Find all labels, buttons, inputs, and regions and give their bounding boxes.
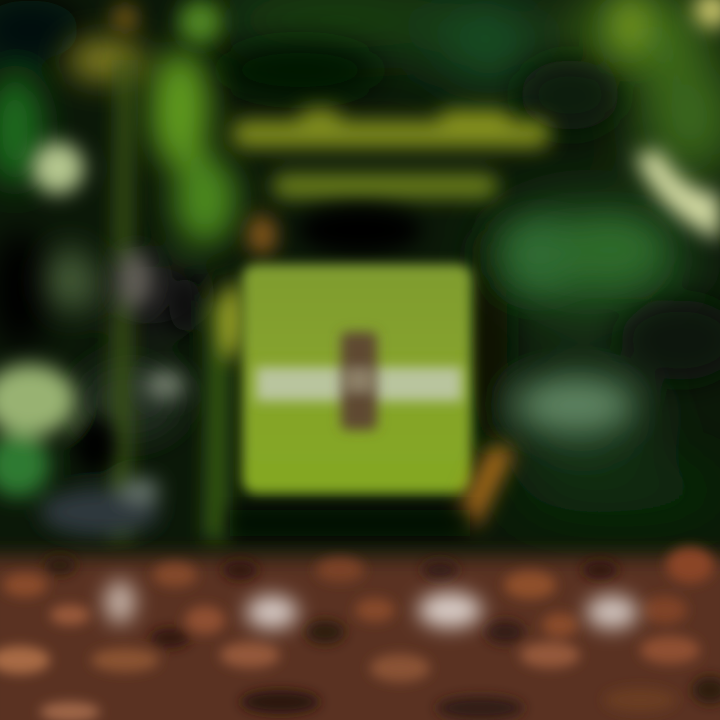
- orange flower stem: [456, 445, 515, 525]
- pale pebbles: [104, 580, 638, 629]
- bamboo plant, left: [32, 0, 276, 540]
- dark arch above box: [298, 206, 422, 254]
- blurred heading lines: [232, 108, 550, 198]
- green product box: [242, 264, 472, 494]
- centre clasp: [341, 332, 377, 430]
- mulch ground: [0, 547, 720, 720]
- pale leaf and dark stones, lower left: [0, 364, 160, 536]
- curved pale leaf, top right: [635, 0, 720, 240]
- background foliage: [0, 0, 720, 514]
- dark strip under box: [230, 510, 470, 536]
- white band: [256, 367, 462, 401]
